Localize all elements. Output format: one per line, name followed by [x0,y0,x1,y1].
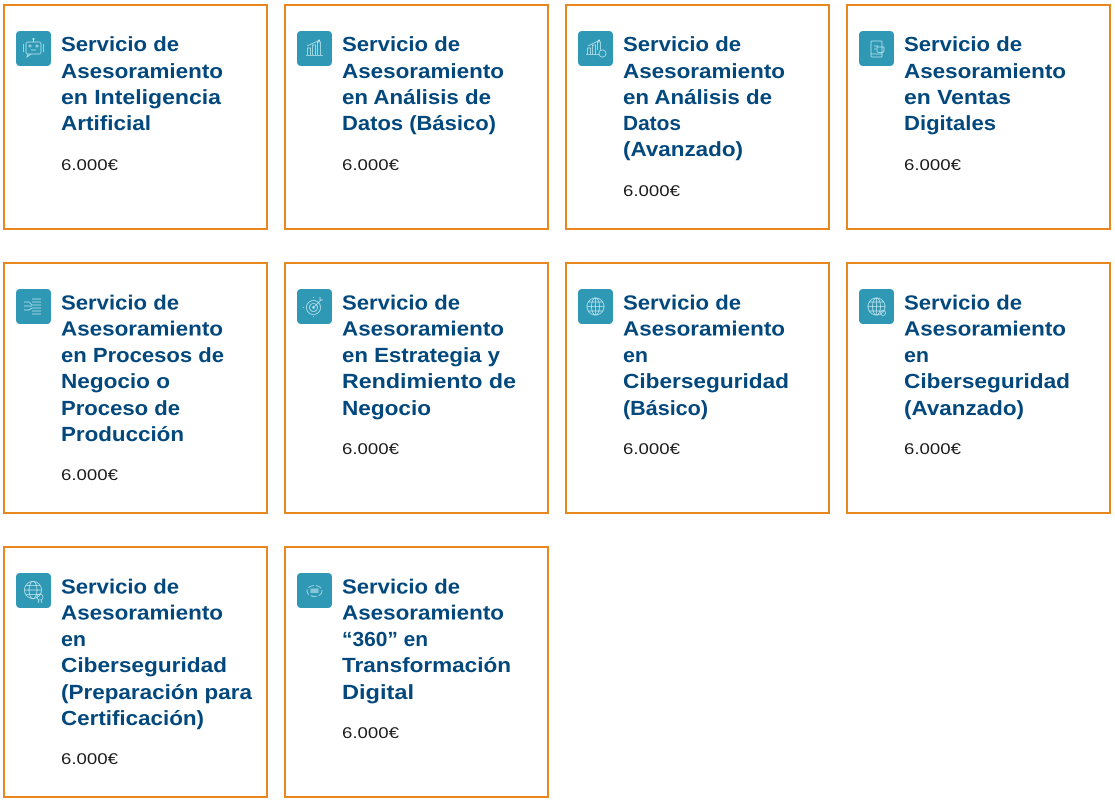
heading: en Inteligencia [61,86,222,109]
heading: Negocio o [61,370,170,393]
heading: Asesoramiento [61,60,223,83]
panel: Análisis de Datos (Avanzado) [566,5,829,229]
heading: Datos (Básico) [342,112,496,135]
icon: globe with certificate [16,573,51,608]
heading: (Avanzado) [623,138,743,161]
heading [61,576,253,730]
heading: en [623,344,648,367]
heading: Producción [61,423,184,446]
heading: Datos [623,112,681,135]
panel: Ciberseguridad (Certificación) [4,547,267,797]
heading: Servicio de [61,576,179,598]
heading [342,33,504,135]
panel: Ventas Digitales [847,5,1110,229]
price: 6.000€ [904,441,961,458]
heading: (Básico) [623,397,708,420]
heading: (Avanzado) [904,397,1024,420]
heading [904,292,1070,420]
heading: Servicio de [623,33,741,56]
icon: robot chat [16,31,51,66]
price: 6.000€ [904,157,961,174]
panel: Análisis de Datos (Básico) [285,5,548,229]
heading: Negocio [342,397,431,420]
panel: 360 Transformación Digital [285,547,548,797]
heading [342,292,516,420]
heading: Asesoramiento [342,318,504,340]
price: 6.000€ [342,157,399,174]
heading: en Análisis de [342,86,491,109]
icon: process list [16,289,51,324]
icon: 360 rotation [297,573,332,608]
heading: Asesoramiento [342,60,504,83]
price: 6.000€ [61,467,118,484]
heading: Ciberseguridad [623,370,789,393]
price: 6.000€ [61,751,118,768]
heading: “360” en [342,628,428,651]
heading: en [61,628,86,651]
price: 6.000€ [623,441,680,458]
heading: Digital [342,681,414,704]
heading: Asesoramiento [61,602,223,624]
heading: Asesoramiento [623,60,785,83]
heading: Servicio de [61,292,179,314]
icon: globe [578,289,613,324]
heading: Servicio de [342,33,460,56]
heading: Ciberseguridad [904,370,1070,393]
heading: (Preparación para [61,681,253,704]
heading: Asesoramiento [904,318,1066,340]
heading: en [904,344,929,367]
heading [342,576,511,704]
icon: bar chart [297,31,332,66]
heading: Ciberseguridad [61,654,227,677]
heading [904,33,1066,135]
panel: Inteligencia Artificial [4,5,267,229]
panel: Estrategia y Rendimiento [285,263,548,513]
heading: Proceso de [61,397,180,420]
heading: Asesoramiento [342,602,504,624]
panel: Procesos de Negocio [4,263,267,513]
price: 6.000€ [623,183,680,200]
icon: target with arrow [297,289,332,324]
heading: Artificial [61,112,151,135]
heading: en Ventas [904,86,1011,109]
heading [61,33,223,135]
heading [61,292,224,446]
heading: Servicio de [904,33,1022,56]
heading: Digitales [904,112,996,135]
price: 6.000€ [61,157,118,174]
heading: Servicio de [904,292,1022,314]
heading: Servicio de [61,33,179,56]
panel: Ciberseguridad (Avanzado) [847,263,1110,513]
panel: Ciberseguridad (Básico) [566,263,829,513]
heading [623,292,789,420]
heading: Servicio de [342,576,460,598]
price: 6.000€ [342,725,399,742]
heading: Asesoramiento [623,318,785,340]
heading: Servicio de [342,292,460,314]
heading: Certificación) [61,707,204,730]
heading: en Procesos de [61,344,224,367]
heading: en Análisis de [623,86,772,109]
heading: Transformación [342,654,511,677]
heading: Asesoramiento [61,318,223,340]
icon: phone with cart [859,31,894,66]
icon: bar chart with gauge [578,31,613,66]
heading: en Estrategia y [342,344,501,367]
icon: globe with badge [859,289,894,324]
heading: Servicio de [623,292,741,314]
heading: Rendimiento de [342,370,516,393]
price: 6.000€ [342,441,399,458]
heading [623,33,785,161]
heading: Asesoramiento [904,60,1066,83]
